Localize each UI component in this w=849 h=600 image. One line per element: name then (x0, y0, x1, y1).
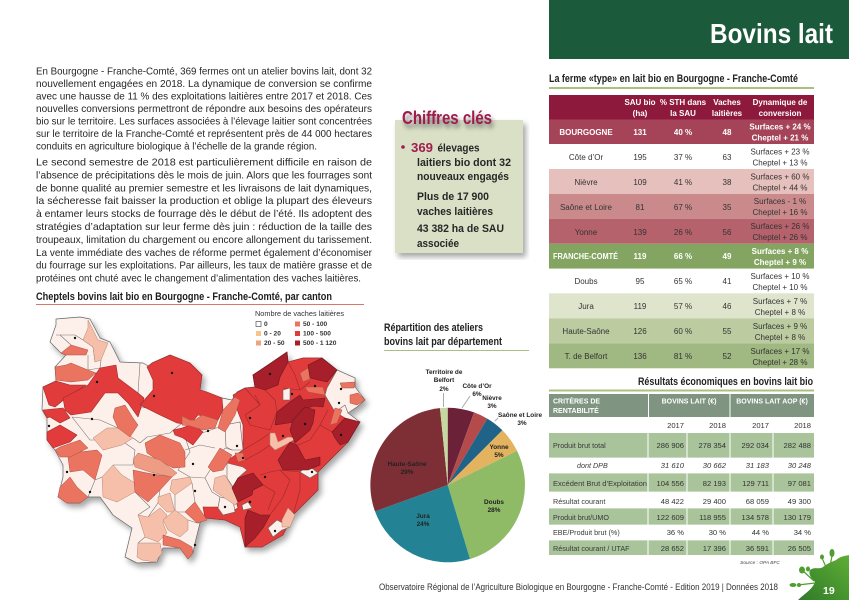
table: la ferme type: 41 % (674, 178, 692, 187)
table: la ferme type: 195 (633, 153, 647, 162)
table: résultats économiques: 104 556 (657, 479, 684, 488)
table: la ferme type: 60 % (674, 327, 692, 336)
table: la ferme type: Cheptel + 9 % (754, 258, 806, 267)
heading: répartition des ateliers: bovins lait par département (384, 336, 502, 348)
table: la ferme type: 46 (723, 302, 732, 311)
text block: introduction paragraphs: de bonne qualité au premier semestre et les livraisons de lait dynamiques, (36, 183, 372, 194)
table: résultats économiques: 118 955 (699, 513, 726, 522)
table: la ferme type: Cheptel + 8 % (755, 308, 805, 317)
pie chart: répartition par département: 24% (417, 521, 430, 528)
pie chart: répartition par département (370, 369, 542, 562)
icon: leaf with page number (790, 549, 849, 600)
panel: chiffres clés: Plus de 17 900 (417, 191, 489, 203)
legend: nombre de vaches laitières (255, 309, 344, 347)
table: la ferme type: Cheptel + 8 % (755, 333, 805, 342)
table: la ferme type: 136 (633, 352, 647, 361)
table: résultats économiques: Produit brut total (553, 441, 606, 450)
table: la ferme type: laitières (712, 109, 743, 118)
heading: chiffres clés: Chiffres clés (402, 108, 492, 128)
pie chart: répartition par département: 3% (487, 403, 497, 410)
text block: introduction paragraphs: En Bourgogne - Franche-Comté, 369 fermes ont un atelier bovins lait, dont 32 (36, 66, 372, 78)
pie chart: répartition par département: Haute-Saône (387, 461, 427, 468)
table: résultats économiques: 31 183 (746, 461, 770, 470)
table: résultats économiques: BOVINS LAIT AOP (€) (736, 398, 808, 406)
text block: introduction paragraphs: protéines ont chuté avec le changement d’alimentation des vaches laitières. (36, 274, 361, 285)
table: la ferme type: Vaches (713, 98, 741, 107)
table: la ferme type: Nièvre (574, 178, 598, 187)
legend: nombre de vaches laitières: 0 (264, 321, 268, 328)
map: cantons de Bourgogne - Franche-Comté (42, 317, 365, 563)
table: la ferme type: Haute-Saône (562, 327, 610, 336)
table: résultats économiques: 17 396 (703, 544, 726, 553)
table: résultats économiques: Résultat courant (553, 497, 605, 506)
table: résultats économiques: 30 662 (703, 461, 727, 470)
text block: introduction paragraphs: du fourrage sur les exploitations. Par ailleurs, les taux de matière grasse et de (36, 261, 372, 272)
header banner: Bovins lait (549, 0, 849, 59)
pie chart: répartition par département: Nièvre (482, 395, 502, 402)
pie chart: répartition par département: Côte d’Or (462, 383, 492, 390)
table: la ferme type: Jura (578, 302, 594, 311)
table: résultats économiques: 68 059 (746, 497, 769, 506)
table: la ferme type: 37 % (674, 153, 692, 162)
table: la ferme type: Cheptel + 26 % (753, 233, 807, 242)
text block: introduction paragraphs: sur le territoire de la Franche-Comté et représentent près de 44 000 hectares (36, 129, 372, 140)
table: la ferme type: 109 (633, 178, 647, 187)
text block: introduction paragraphs: l’absence de précipitations dès le mois de juin. Alors que les fourrages sont (36, 170, 372, 181)
table: la ferme type: (ha) (633, 109, 648, 118)
table: la ferme type: Surfaces + 7 % (753, 297, 807, 306)
pie chart: répartition par département: Yonne (489, 444, 509, 451)
table: la ferme type: Cheptel + 21 % (752, 134, 808, 142)
pie chart: répartition par département: 2% (439, 386, 449, 393)
table: résultats économiques: 2018 (794, 421, 811, 430)
table: la ferme type: 81 (636, 203, 645, 212)
table: la ferme type: 66 % (674, 252, 692, 261)
table: la ferme type: Doubs (574, 277, 598, 286)
table: résultats économiques: 34 % (794, 528, 811, 537)
table: résultats économiques: EBE/Produit brut (%) (553, 528, 620, 537)
text block: introduction paragraphs: Le second semestre de 2018 est particulièrement difficile en raison de (36, 158, 372, 168)
table: la ferme type: Surfaces + 9 % (753, 322, 807, 331)
text block: introduction paragraphs: la sécheresse fait baisser la production et oblige la plupart des éleveurs (36, 196, 372, 207)
pie chart: répartition par département: 29% (401, 469, 414, 476)
legend: nombre de vaches laitières: 500 - 1 120 (303, 340, 337, 347)
table: la ferme type: 139 (633, 228, 647, 237)
table: résultats économiques: 122 609 (657, 513, 684, 522)
table: résultats économiques: 26 505 (788, 544, 811, 553)
legend: nombre de vaches laitières: 0 - 20 (264, 330, 281, 338)
table: résultats économiques: 134 578 (742, 513, 769, 522)
text block: introduction paragraphs (36, 66, 373, 285)
heading: la ferme type: La ferme «type» en lait bio en Bourgogne - Franche-Comté (549, 73, 798, 85)
table: la ferme type: 119 (634, 302, 647, 311)
table: résultats économiques: Excédent Brut d’Exploitation (553, 479, 647, 488)
text block: introduction paragraphs: nouvellement engagées en 2018. La dynamique de conversion se confirme (36, 79, 372, 90)
table: résultats économiques: 48 422 (661, 497, 684, 506)
pie chart: répartition par département: Belfort (434, 377, 455, 384)
table: la ferme type: Surfaces + 24 % (749, 122, 811, 132)
text block: introduction paragraphs: avec une hausse de 11 % des exploitations laitières entre 2017 et 2018. Ces (36, 92, 372, 102)
table: la ferme type: Cheptel + 28 % (753, 358, 807, 367)
panel: chiffres clés: vaches laitières (417, 206, 493, 218)
panel: chiffres clés (395, 108, 523, 253)
table: résultats économiques: Produit brut/UMO (553, 513, 609, 522)
table: la ferme type: Yonne (575, 228, 598, 237)
table: résultats économiques: 97 081 (788, 479, 811, 488)
icon: leaf with page number: 19 (823, 585, 835, 597)
table: la ferme type: Surfaces - 1 % (754, 197, 806, 206)
source note: Source : OPA BFC (740, 560, 780, 566)
table: la ferme type: Surfaces + 26 % (751, 222, 809, 231)
table: résultats économiques: 278 354 (699, 441, 726, 450)
heading: résultats économiques: Résultats économiques en bovins lait bio (638, 376, 813, 388)
header banner: Bovins lait: Bovins lait (710, 18, 833, 49)
legend: nombre de vaches laitières: 50 - 100 (303, 321, 328, 328)
pie chart: répartition par département: 6% (472, 391, 482, 398)
table: résultats économiques: BOVINS LAIT (€) (662, 398, 716, 406)
table: résultats économiques: 2017 (667, 421, 684, 430)
legend: nombre de vaches laitières: Nombre de vaches laitières (255, 309, 344, 318)
table: résultats économiques: 28 652 (661, 544, 684, 553)
table: résultats économiques: 130 179 (784, 513, 811, 522)
table: résultats économiques: 36 591 (746, 544, 769, 553)
table: résultats économiques: 36 % (667, 528, 684, 537)
heading: répartition des ateliers: Répartition des ateliers (384, 322, 483, 334)
table: résultats économiques (549, 394, 814, 555)
table: la ferme type: BOURGOGNE (559, 128, 613, 137)
heading: répartition des ateliers (384, 322, 529, 351)
table: la ferme type: Surfaces + 23 % (751, 148, 809, 156)
table: la ferme type: 126 (633, 327, 647, 336)
table: la ferme type: Cheptel + 44 % (753, 184, 807, 192)
table: la ferme type: Cheptel + 16 % (753, 208, 807, 217)
panel: chiffres clés: 369 (411, 140, 433, 155)
table: la ferme type: Surfaces + 10 % (751, 272, 809, 281)
table: résultats économiques: CRITÈRES DE (553, 396, 600, 406)
table: la ferme type: 67 % (674, 203, 692, 212)
panel: chiffres clés: nouveaux engagés (417, 171, 509, 183)
table: résultats économiques: Résultat courant / UTAF (553, 544, 630, 553)
table: la ferme type: 56 (723, 228, 732, 237)
table: la ferme type: 49 (723, 252, 732, 261)
table: résultats économiques: 82 193 (703, 479, 726, 488)
table: la ferme type: Cheptel + 10 % (753, 283, 807, 292)
text block: introduction paragraphs: bio sur le territoire. Les surfaces associées à l’élevage laitier sont concentrées (36, 116, 372, 128)
table: résultats économiques: 29 400 (703, 497, 726, 506)
footer text: Observatoire Régional de l’Agriculture Biologique en Bourgogne - Franche-Comté - Edition 2019 | Données 2018 (379, 582, 778, 592)
pie chart: répartition par département: Territoire de (426, 369, 463, 376)
table: la ferme type: 26 % (674, 228, 692, 237)
table: la ferme type: 52 (723, 352, 732, 361)
table: résultats économiques: 292 034 (742, 441, 769, 450)
text block: introduction paragraphs: nouvelles conversions permettront de répondre aux besoins des opérateurs (36, 104, 372, 115)
table: résultats économiques: 2018 (709, 421, 726, 430)
text block: introduction paragraphs: La vente immédiate des vaches de réforme permet également d’économiser (36, 248, 373, 259)
pie chart: répartition par département: 5% (494, 452, 504, 459)
table: la ferme type (549, 95, 814, 368)
table: la ferme type: FRANCHE-COMTÉ (553, 252, 619, 261)
table: la ferme type: Surfaces + 60 % (751, 172, 809, 182)
table: la ferme type: 35 (723, 203, 732, 212)
table: la ferme type: % STH dans (660, 98, 707, 107)
table: la ferme type: 55 (723, 327, 732, 336)
pie chart: répartition par département: Jura (416, 513, 430, 520)
table: résultats économiques: 2017 (752, 421, 769, 430)
table: la ferme type: 81 % (674, 352, 692, 361)
table: la ferme type: 48 (723, 128, 732, 137)
text block: introduction paragraphs: stratégies d’adaptation sur leur ferme dès juin : réduction de la taille des (36, 222, 372, 233)
pie chart: répartition par département: Doubs (484, 499, 504, 506)
table: résultats économiques: 282 488 (784, 441, 811, 450)
panel: chiffres clés: laitiers bio dont 32 (417, 157, 511, 169)
pie chart: répartition par département: 3% (517, 420, 527, 427)
table: la ferme type: 57 % (674, 302, 692, 311)
table: la ferme type: 41 (723, 277, 732, 286)
table: résultats économiques: 286 906 (657, 441, 684, 450)
panel: chiffres clés: 43 382 ha de SAU (417, 223, 504, 235)
table: la ferme type: 95 (636, 277, 645, 286)
table: la ferme type: SAU bio (624, 98, 656, 107)
heading: cheptels par canton: Cheptels bovins lait bio en Bourgogne - Franche-Comté, par canton (36, 291, 332, 303)
legend: nombre de vaches laitières: 20 - 50 (264, 340, 285, 347)
legend: nombre de vaches laitières: 100 - 500 (303, 330, 331, 338)
table: résultats économiques: 44 % (752, 528, 769, 537)
table: la ferme type: la SAU (670, 109, 696, 118)
table: la ferme type: Saône et Loire (560, 203, 613, 212)
table: résultats économiques: 31 610 (661, 461, 685, 470)
pie chart: répartition par département: Saône et Loire (498, 412, 542, 419)
table: la ferme type: Cheptel + 13 % (753, 158, 807, 168)
table: résultats économiques: RENTABILITÉ (553, 406, 599, 415)
table: la ferme type: 38 (723, 178, 732, 187)
table: la ferme type: 63 (723, 153, 732, 162)
table: la ferme type: Dynamique de (753, 98, 808, 107)
text block: introduction paragraphs: conduits en agriculture biologique à l’échelle de la grande région. (36, 142, 317, 152)
table: résultats économiques: 30 % (709, 528, 726, 537)
text block: introduction paragraphs: troupeaux, limitation du chargement ou encore allongement du tarissement. (36, 235, 372, 246)
table: la ferme type: conversion (759, 109, 801, 118)
table: résultats économiques: 129 711 (742, 479, 769, 488)
table: résultats économiques: dont DPB (577, 461, 608, 470)
text block: introduction paragraphs: à entamer leurs stocks de fourrage dès le début de l’été. Ils adoptent des (36, 209, 372, 220)
table: la ferme type: Surfaces + 17 % (751, 347, 809, 356)
table: la ferme type: 131 (633, 128, 647, 137)
table: la ferme type: T. de Belfort (565, 352, 608, 361)
panel: chiffres clés: élevages (438, 142, 480, 154)
pie chart: répartition par département: 28% (488, 507, 501, 514)
table: résultats économiques: 49 300 (788, 497, 811, 506)
table: résultats économiques: 30 248 (788, 461, 812, 470)
panel: chiffres clés: associée (417, 238, 459, 250)
table: la ferme type: Surfaces + 8 % (752, 247, 808, 256)
table: la ferme type: Côte d’Or (569, 153, 603, 162)
table: la ferme type: 119 (634, 252, 647, 261)
table: la ferme type: 40 % (674, 128, 692, 137)
table: la ferme type: 65 % (674, 277, 692, 286)
